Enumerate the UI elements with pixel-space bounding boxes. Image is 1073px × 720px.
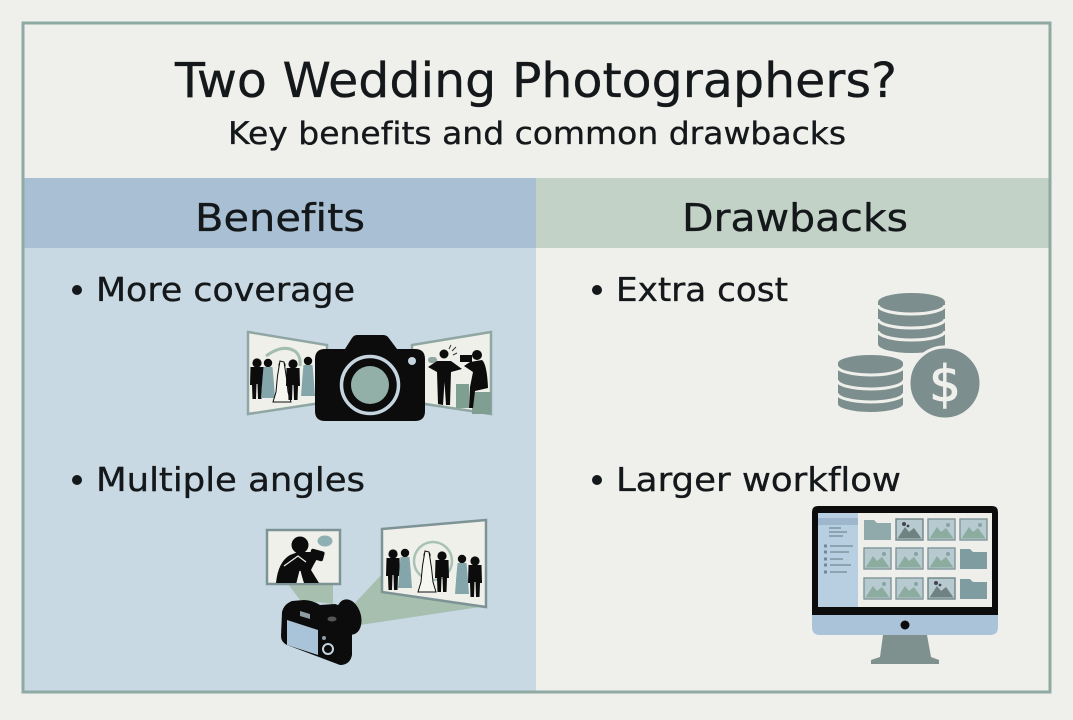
dollar coin: $: [929, 355, 961, 413]
left scene: wedding party: [248, 332, 327, 414]
monitor stand: [871, 635, 939, 664]
main camera: [315, 335, 425, 421]
bullet: larger workflow: Larger workflow: [616, 460, 901, 499]
upper coin stack: [878, 293, 945, 353]
large frame: wedding party: [382, 520, 486, 607]
sidebar: [818, 513, 858, 607]
icon: camera capturing two views: [267, 520, 486, 665]
icon: monitor with photo library: [812, 506, 998, 664]
monitor chin: [812, 612, 998, 635]
subtitle: Key benefits and common drawbacks: [228, 116, 846, 152]
icon: camera with two wedding scenes: [248, 332, 491, 421]
panel: benefits: [23, 178, 536, 692]
right scene: guest and photographer: [412, 332, 491, 414]
screen: [818, 513, 992, 607]
heading: benefits: Benefits: [195, 196, 365, 240]
benefits header band: [23, 178, 536, 248]
small frame: photographer: [267, 530, 340, 584]
bullet: multiple angles: Multiple angles: [96, 460, 365, 499]
light beams: [288, 584, 333, 604]
rear camera body: [281, 597, 365, 665]
monitor bezel: [812, 506, 998, 615]
file grid: [864, 519, 987, 599]
heading: drawbacks: Drawbacks: [682, 196, 908, 240]
bullet: more coverage: More coverage: [96, 270, 355, 309]
dollar coin: [909, 347, 981, 419]
power button: [900, 620, 910, 630]
lower coin stack: [837, 354, 904, 413]
title: Two Wedding Photographers?: [174, 53, 897, 109]
bullet: extra cost: Extra cost: [616, 270, 788, 309]
panel: drawbacks header band: [536, 178, 1050, 248]
icon: coin stacks and dollar: [837, 293, 981, 419]
